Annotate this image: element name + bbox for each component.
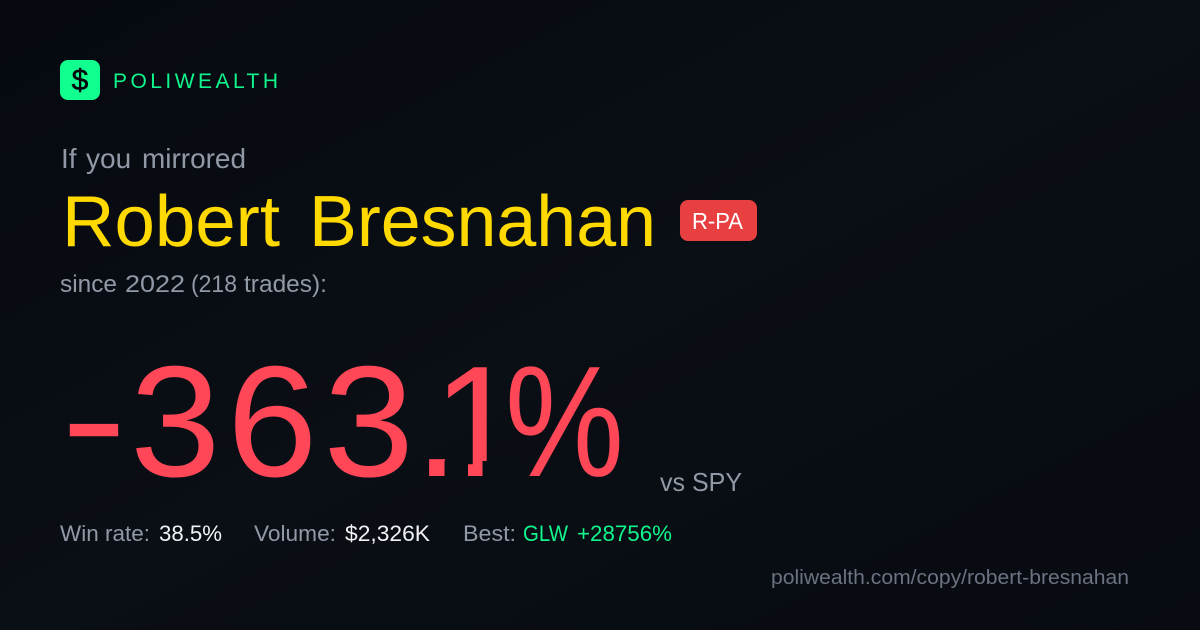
party badge [680, 200, 757, 241]
icon: dollar badge: $ [72, 64, 89, 97]
stats row [60, 521, 672, 546]
main figure: 6 [227, 334, 318, 510]
logo [60, 60, 278, 100]
icon: dollar badge [60, 60, 100, 100]
main figure: 3 [324, 334, 414, 510]
stat: win rate [60, 521, 222, 546]
heading: name: Robert [62, 182, 280, 262]
intro text: mirrored [142, 143, 246, 174]
intro text: you [86, 143, 131, 174]
period text: (218 [191, 271, 237, 298]
main figure: 3 [130, 334, 220, 510]
intro text: If [61, 143, 77, 174]
party badge: R-PA [692, 208, 744, 234]
stat: volume: Volume: [254, 521, 336, 546]
stat: best: Best: [463, 521, 516, 546]
period text: trades): [244, 271, 327, 298]
stat: volume: $2,326K [345, 521, 430, 546]
period text: since [60, 271, 117, 298]
stat: win rate: Win rate: [60, 521, 150, 546]
stat: best: +28756% [577, 521, 672, 546]
stat: best [463, 521, 672, 546]
period text: 2022 [125, 271, 185, 298]
stat: volume [254, 521, 430, 546]
main figure: - [61, 330, 127, 506]
benchmark label: vs SPY [660, 467, 742, 497]
brand name: POLIWEALTH [113, 70, 278, 93]
stat: win rate: 38.5% [159, 521, 222, 546]
heading: name: Bresnahan [309, 182, 656, 262]
main figure: % [505, 334, 624, 510]
url: poliwealth.com/copy/robert-bresnahan [771, 567, 1129, 589]
main figure: 1 [433, 334, 521, 510]
main figure: . [414, 334, 460, 510]
stat: best: GLW [523, 521, 568, 546]
main figure [61, 330, 624, 510]
